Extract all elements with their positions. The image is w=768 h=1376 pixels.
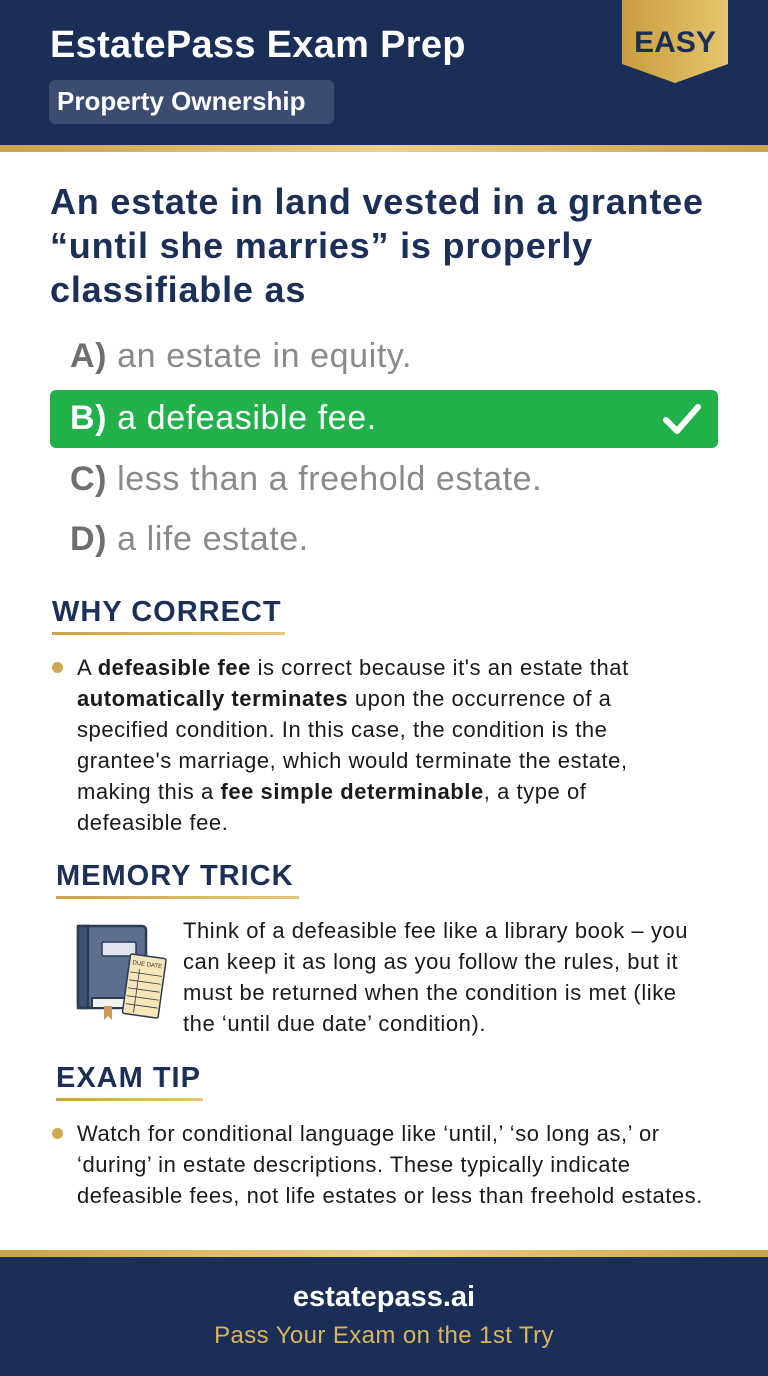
- option B correct: [50, 390, 718, 448]
- option C: C) less than a freehold estate.: [70, 460, 542, 498]
- question: classifiable as: [50, 269, 306, 310]
- option A: A) an estate in equity.: [70, 337, 412, 375]
- why correct text: defeasible fee.: [77, 810, 228, 835]
- footer tagline: Pass Your Exam on the 1st Try: [214, 1322, 554, 1349]
- exam tip text: defeasible fees, not life estates or less than freehold estates.: [77, 1183, 703, 1208]
- option D: D) a life estate.: [70, 520, 309, 558]
- category tag: [49, 80, 334, 124]
- footer: [0, 1250, 768, 1376]
- memory trick text: the ‘until due date’ condition).: [183, 1011, 486, 1036]
- why correct text: A defeasible fee is correct because it's an estate that: [77, 655, 629, 680]
- memory trick text: Think of a defeasible fee like a library book – you: [183, 918, 688, 943]
- category tag: Property Ownership: [57, 86, 306, 116]
- option B correct: B) a defeasible fee.: [70, 399, 377, 437]
- why correct text: [52, 655, 629, 835]
- heading: memory trick: MEMORY TRICK: [56, 860, 294, 892]
- exam tip text: Watch for conditional language like ‘until,’ ‘so long as,’ or: [77, 1121, 660, 1146]
- exam tip text: [52, 1121, 703, 1208]
- exam tip text: ‘during’ in estate descriptions. These typically indicate: [77, 1152, 631, 1177]
- why correct text: specified condition. In this case, the condition is the: [77, 717, 607, 742]
- why correct text: automatically terminates upon the occurrence of a: [77, 686, 611, 711]
- question: [50, 181, 704, 310]
- heading: why correct: WHY CORRECT: [52, 596, 282, 628]
- header title: EstatePass Exam Prep: [50, 24, 466, 66]
- icon: library book: [76, 924, 167, 1020]
- memory trick text: can keep it as long as you follow the rules, but it: [183, 949, 678, 974]
- difficulty badge: EASY: [634, 26, 716, 59]
- difficulty badge: [622, 0, 728, 83]
- memory trick text: [183, 918, 688, 1036]
- heading: exam tip: EXAM TIP: [56, 1062, 201, 1094]
- question: “until she marries” is properly: [50, 225, 593, 266]
- memory trick text: must be returned when the condition is met (like: [183, 980, 677, 1005]
- why correct text: grantee's marriage, which would terminate the estate,: [77, 748, 628, 773]
- why correct text: making this a fee simple determinable, a type of: [77, 779, 586, 804]
- footer site: estatepass.ai: [293, 1281, 475, 1313]
- icon: library book: DUE DATE: [132, 960, 162, 970]
- question: An estate in land vested in a grantee: [50, 181, 704, 222]
- icon: check: [663, 404, 701, 434]
- header: [0, 0, 768, 145]
